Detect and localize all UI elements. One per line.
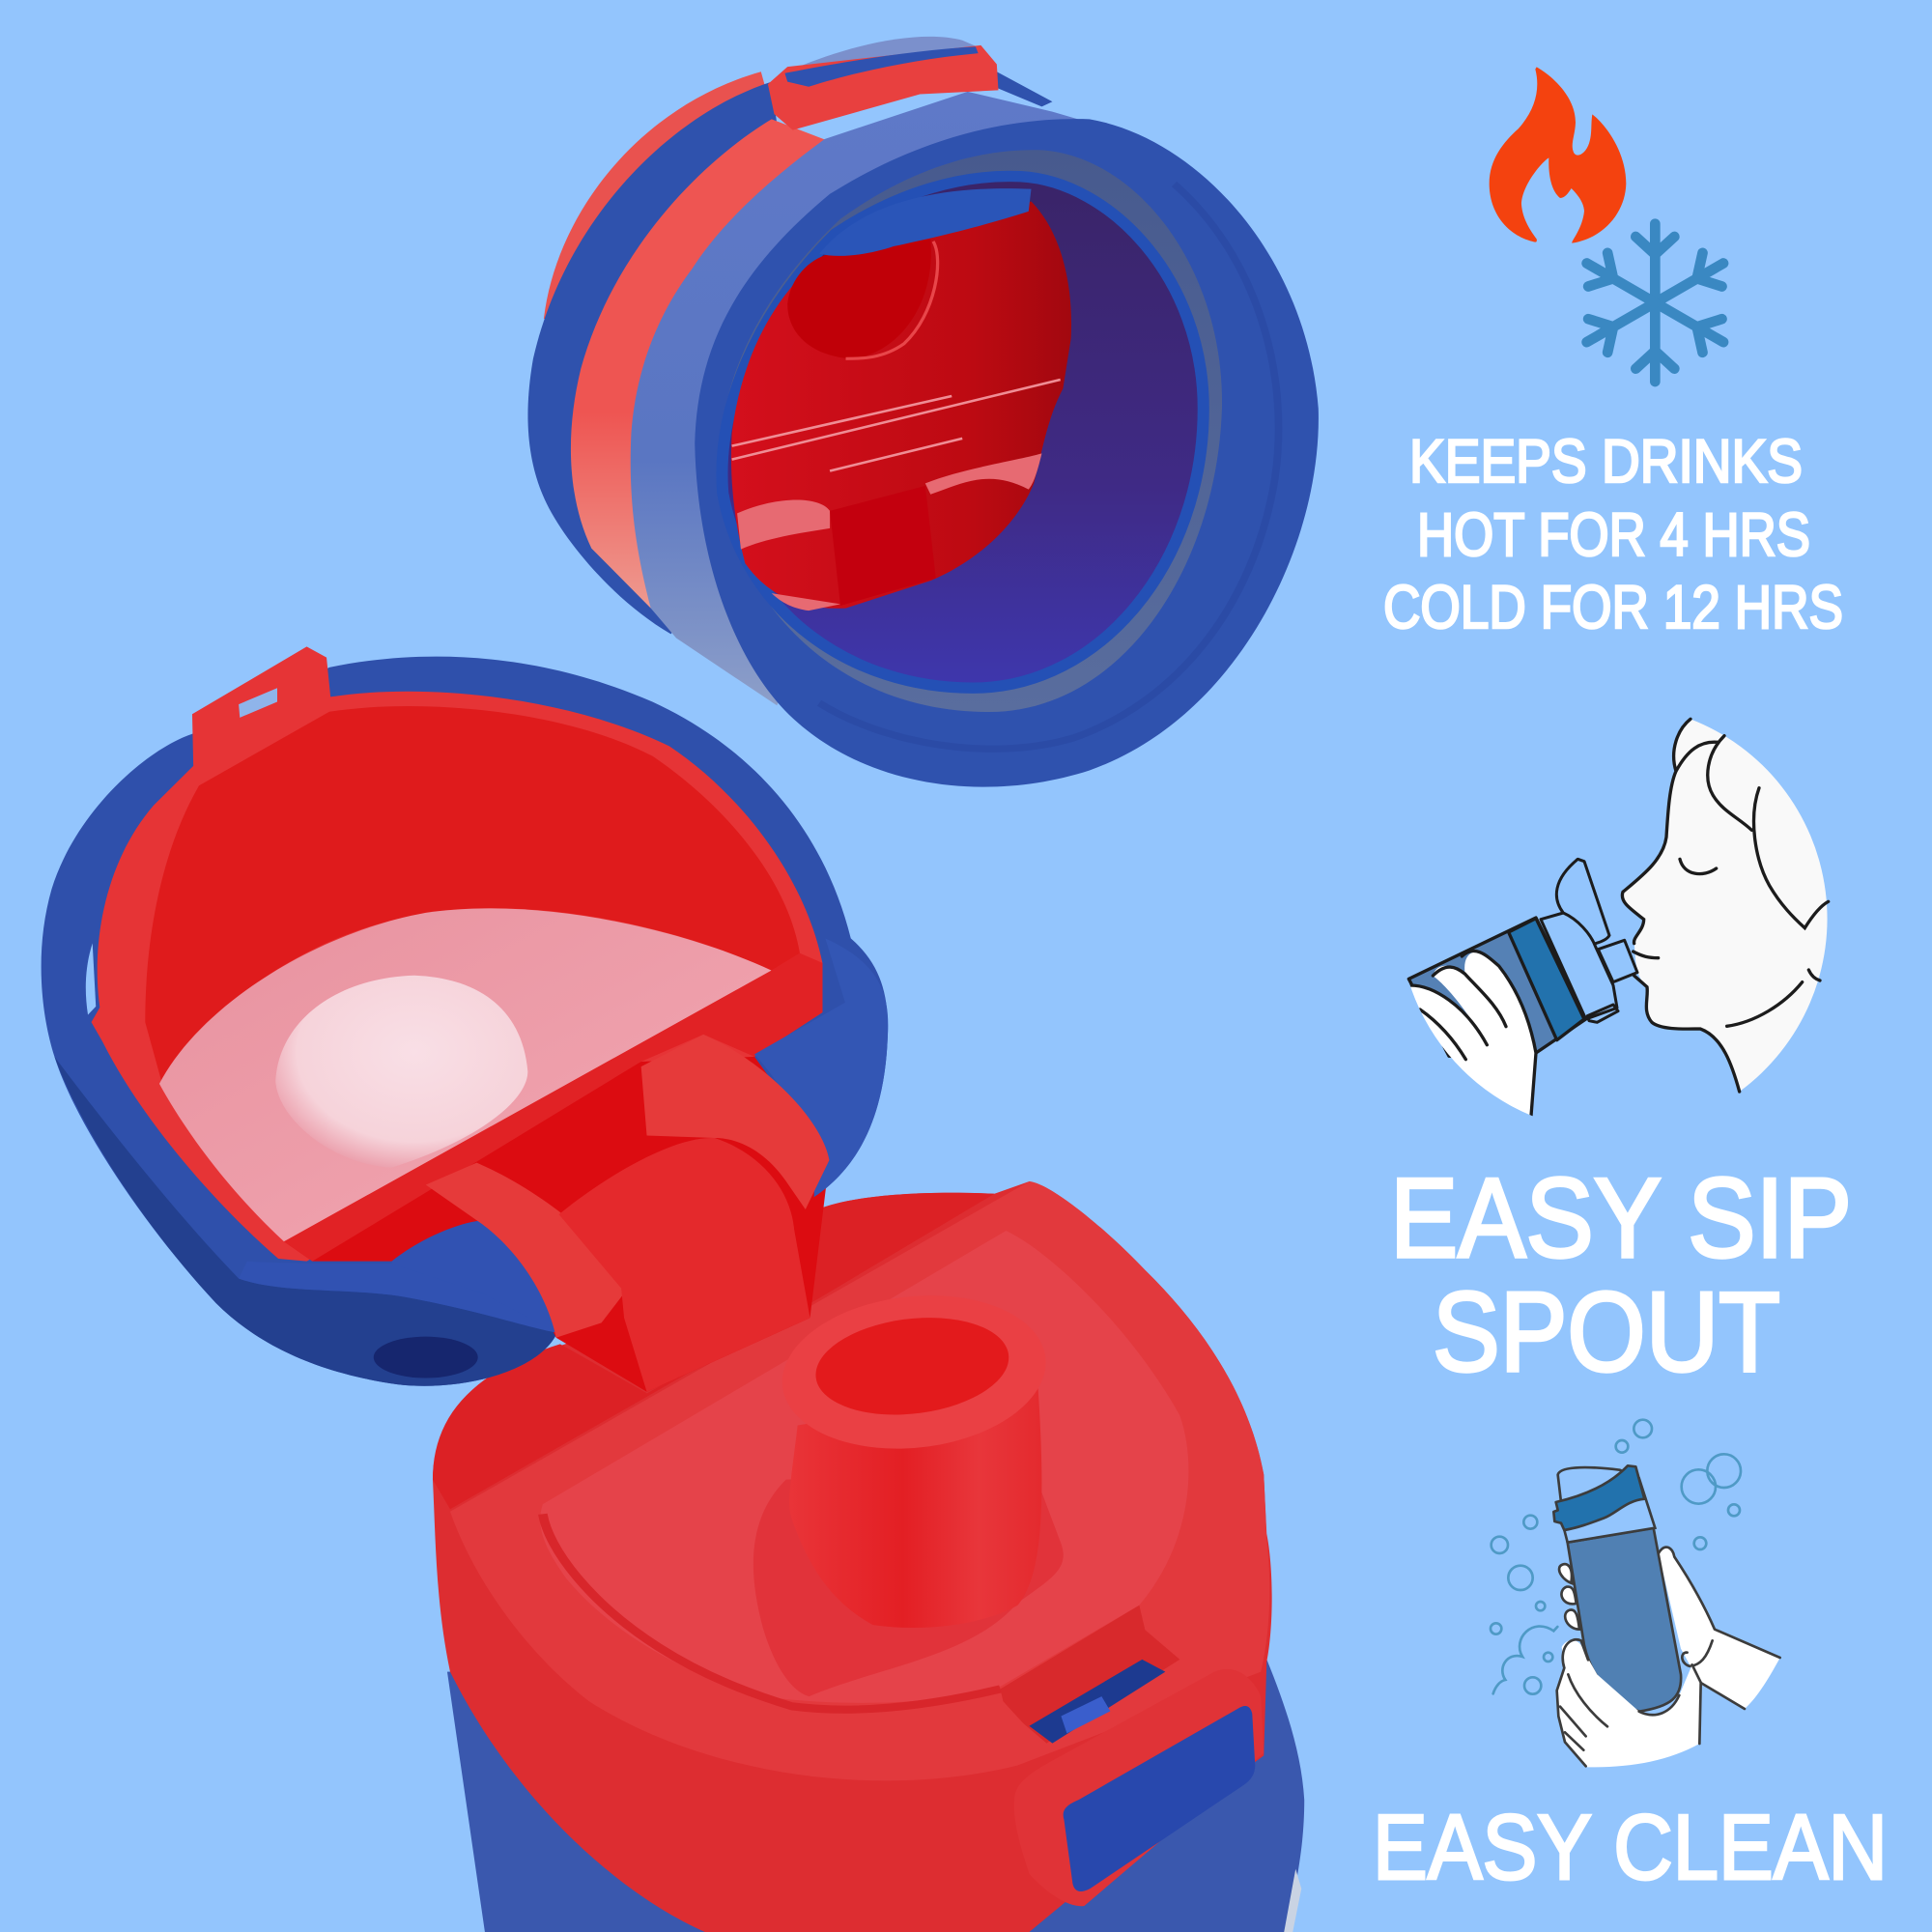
top cover behind clip [784, 37, 979, 76]
spout mouth rim [769, 1280, 1059, 1464]
inner round boss [787, 239, 931, 358]
text line: hot for 4 hrs: HOT FOR 4 HRS [1417, 501, 1810, 569]
bottle body [1408, 918, 1586, 1056]
heading line: easy sip: EASY SIP [1390, 1154, 1852, 1281]
gasket plug button [275, 976, 527, 1168]
face silhouette [1622, 719, 1828, 1092]
icon: person sipping from bottle [1408, 719, 1829, 1116]
heading: easy sip spout [1390, 1154, 1852, 1395]
bottle lid band [1553, 1465, 1644, 1530]
central hinge block [559, 1138, 810, 1392]
hand [1410, 951, 1536, 1116]
latch slot [1029, 1660, 1165, 1744]
rim thread shading [819, 184, 1279, 749]
boss highlight [846, 242, 938, 358]
right hand outline [1659, 1548, 1780, 1709]
spout base shadow [753, 1475, 1064, 1696]
bottle blue body [447, 1652, 1304, 1932]
blue lip front [239, 1262, 557, 1333]
spout opening [808, 1306, 1017, 1426]
inner moulded ridge lines [732, 380, 1061, 471]
photo: bottle with open spout [433, 1181, 1304, 1932]
lid pin hole [374, 1337, 478, 1378]
icon: snowflake [1577, 224, 1733, 382]
photo: opened flip lid [42, 646, 888, 1392]
blue inner lip and cavity [722, 176, 1204, 688]
latch pin [1061, 1696, 1110, 1733]
bottle lid top [1558, 1467, 1655, 1543]
recessed panel lower lip [543, 1514, 1000, 1710]
spout plate face [450, 1181, 1269, 1780]
icon: flame [1490, 67, 1626, 243]
glass seal ring [719, 150, 1222, 712]
red strap clip [768, 45, 998, 130]
red latch clasp [1014, 1669, 1264, 1906]
blue hinge corner left [392, 1220, 557, 1333]
red tray rim [92, 646, 822, 1262]
tray inner wall [145, 706, 800, 1084]
dark blue outer rim [695, 119, 1319, 787]
bottle spout and lid [1541, 859, 1637, 1022]
red inside wall [731, 202, 1071, 609]
bottle dark band [1509, 919, 1584, 1040]
lid blue outer shell [42, 657, 888, 1386]
pink silicone gasket [159, 908, 772, 1241]
recessed face panel [540, 1231, 1188, 1703]
latch recess [1000, 1605, 1179, 1744]
label sliver [1284, 1869, 1301, 1932]
back strap right stub [994, 71, 1052, 106]
rear shaded deck [433, 1193, 994, 1509]
text: insulation claim [1383, 428, 1843, 641]
right hinge knuckle [641, 1035, 829, 1209]
bottle lower body [1568, 1528, 1681, 1712]
text line: keeps drinks: KEEPS DRINKS [1409, 428, 1803, 496]
text line: cold for 12 hrs: COLD FOR 12 HRS [1383, 574, 1843, 641]
left hand outlines [1557, 1639, 1701, 1766]
red dome behind the strap [544, 71, 777, 319]
bottle red cap body [433, 1181, 1272, 1932]
icon: flame and snowflake [1490, 67, 1733, 382]
left hinge knuckle [426, 1163, 624, 1338]
bubbles [1491, 1420, 1741, 1694]
lighter blue skirt [631, 92, 1094, 705]
background gap [86, 944, 96, 1015]
red centre band [571, 119, 830, 609]
left hand [1557, 1640, 1701, 1767]
blue hinge corner right [754, 938, 888, 1197]
blue strap [527, 82, 777, 634]
heading line: spout: SPOUT [1433, 1268, 1780, 1395]
left fingers [1559, 1564, 1579, 1630]
spout stem [789, 1386, 1041, 1628]
photo: detached inner cap seen from below [527, 37, 1319, 787]
right hand [1659, 1547, 1780, 1709]
tab slot [239, 688, 277, 718]
hinge base [284, 1057, 829, 1392]
lid front red wall [284, 953, 822, 1262]
lid shell dark underside [54, 1057, 557, 1386]
blue latch button [1064, 1706, 1255, 1891]
glossy lower highlights [737, 453, 1041, 611]
icon: hands cleaning bottle [1491, 1420, 1780, 1767]
latch window [830, 486, 936, 606]
face outlines [1622, 719, 1829, 1092]
blue inner flap [819, 188, 1032, 256]
blue clip tab [784, 46, 979, 87]
